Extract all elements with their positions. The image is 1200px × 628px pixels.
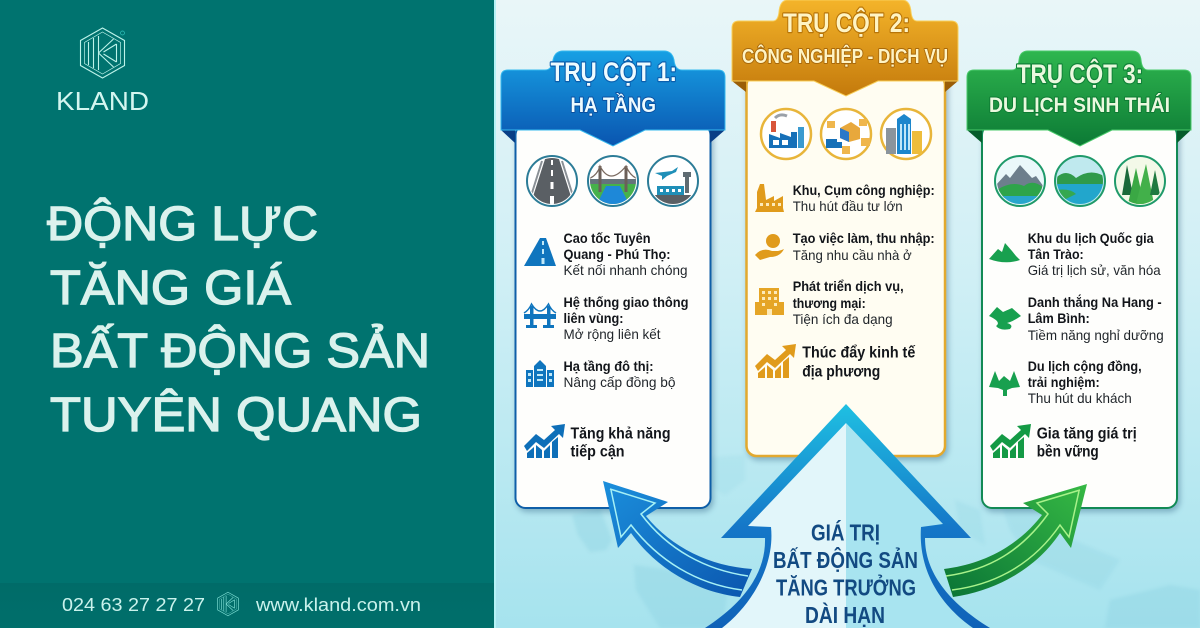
heading: main title: ĐỘNG LỰC	[47, 197, 318, 251]
arrow: blue curved arrow to pillar 1	[603, 481, 752, 597]
text: community tourism: Du lịch cộng đồng,	[1028, 358, 1142, 374]
logo: KLAND	[56, 28, 149, 116]
text: expressway: Kết nối nhanh chóng	[564, 262, 688, 278]
panel: left teal title panel	[0, 0, 494, 628]
text: Tan Trao: Tân Trào:	[1028, 246, 1084, 262]
text: Na Hang: Lâm Bình:	[1028, 310, 1090, 326]
text: sustainable value	[1037, 426, 1137, 460]
text: regional transport	[564, 294, 688, 342]
text: expressway: Quang - Phú Thọ:	[564, 246, 670, 262]
card body	[746, 75, 945, 456]
text: long-term property value: GIÁ TRỊ	[811, 518, 880, 546]
text: industrial parks: Khu, Cụm công nghiệp:	[793, 182, 935, 198]
text: jobs and income: Tăng nhu cầu nhà ở	[793, 247, 912, 263]
icon: bridge	[524, 304, 556, 328]
text: community tourism: Thu hút du khách	[1028, 390, 1132, 406]
text: urban infrastructure: Nâng cấp đồng bộ	[564, 374, 676, 390]
text: regional transport: Hệ thống giao thông	[564, 294, 688, 310]
arrow: central upward arrow	[705, 404, 990, 628]
text: services and trade: thương mại:	[793, 295, 866, 311]
text: urban infrastructure: Hạ tầng đô thị:	[564, 358, 654, 374]
text: regional transport: liên vùng:	[564, 310, 624, 326]
panel: infographic background with world map	[494, 0, 1200, 628]
icon: logistics circle	[821, 109, 871, 159]
text: services and trade: Phát triển dịch vụ,	[793, 278, 904, 294]
text: local economy: Thúc đẩy kinh tế	[802, 344, 915, 362]
text: long-term property value: TĂNG TRƯỞNG	[776, 572, 916, 600]
heading: pillar 3 ribbon: DU LỊCH SINH THÁI	[989, 94, 1170, 117]
footer: contact bar: 024 63 27 27 27	[62, 595, 205, 615]
icon: green mountain	[989, 243, 1020, 262]
heading: pillar 3 ribbon	[967, 51, 1191, 146]
text: Tan Trao: Giá trị lịch sử, văn hóa	[1028, 262, 1161, 278]
icon: forest circle	[1115, 156, 1165, 206]
icon: road	[524, 238, 556, 266]
icon: highway circle	[527, 156, 577, 206]
icon: city circle	[881, 109, 931, 159]
card body	[516, 125, 710, 508]
icon: gold trend	[755, 344, 796, 378]
panel: pillar 3 eco tourism	[967, 51, 1191, 508]
heading: pillar 1 ribbon: HẠ TẦNG	[570, 94, 656, 117]
text: Na Hang: Danh thắng Na Hang -	[1028, 293, 1162, 310]
icon: bridge circle	[588, 156, 638, 206]
text: regional transport: Mở rộng liên kết	[564, 326, 661, 342]
icon: city buildings	[526, 360, 554, 387]
icon: green landscape	[989, 307, 1021, 330]
text: local economy	[802, 344, 915, 380]
text: accessibility: tiếp cận	[570, 444, 624, 460]
text: sustainable value: bền vững	[1037, 444, 1099, 460]
text: services and trade	[793, 278, 904, 327]
text: jobs and income: Tạo việc làm, thu nhập:	[793, 230, 935, 246]
card body	[982, 125, 1177, 508]
icon: airport circle	[648, 156, 698, 206]
text: Tan Trao	[1028, 230, 1161, 278]
text: accessibility: Tăng khả năng	[570, 426, 670, 442]
icon: small logo	[218, 592, 238, 616]
heading: pillar 2 ribbon: CÔNG NGHIỆP - DỊCH VỤ	[742, 44, 948, 68]
heading: pillar 1 ribbon: TRỤ CỘT 1:	[550, 56, 677, 87]
icon: green trend	[990, 424, 1031, 458]
heading: pillar 2 ribbon	[732, 0, 958, 96]
icon: river circle	[1055, 156, 1105, 206]
arrow: green curved arrow to pillar 3	[944, 484, 1087, 597]
text: industrial parks: Thu hút đầu tư lớn	[793, 198, 903, 214]
heading: pillar 1 ribbon	[501, 51, 725, 146]
text: Na Hang: Tiềm năng nghỉ dưỡng	[1028, 327, 1164, 343]
icon: factory	[755, 184, 784, 212]
heading: main title: TĂNG GIÁ	[50, 262, 291, 315]
text: accessibility	[570, 426, 670, 460]
heading: main title	[47, 197, 430, 442]
text: community tourism	[1028, 358, 1142, 406]
icon: factory circle	[761, 109, 811, 159]
text: services and trade: Tiện ích đa dạng	[793, 311, 893, 327]
text: local economy: địa phương	[802, 364, 880, 380]
icon: blue trend	[524, 424, 565, 458]
text: long-term property value: DÀI HẠN	[805, 601, 885, 628]
text: community tourism: trải nghiệm:	[1028, 374, 1100, 390]
heading: main title: BẤT ĐỘNG SẢN	[50, 323, 430, 378]
panel: pillar 2 industry and services	[732, 0, 958, 456]
heading: pillar 2 ribbon: TRỤ CỘT 2:	[783, 7, 910, 38]
text: Na Hang	[1028, 293, 1164, 343]
logo: KLAND: KLAND	[56, 86, 149, 116]
text: expressway: Cao tốc Tuyên	[564, 230, 650, 246]
text: urban infrastructure	[564, 358, 676, 390]
panel: pillar 1 infrastructure	[501, 51, 725, 508]
icon: green trees	[989, 371, 1020, 396]
text: sustainable value: Gia tăng giá trị	[1037, 426, 1137, 442]
heading: pillar 3 ribbon: TRỤ CỘT 3:	[1017, 58, 1143, 89]
icon: mountain circle	[994, 156, 1046, 206]
footer: contact bar	[0, 583, 494, 628]
heading: main title: TUYÊN QUANG	[50, 389, 422, 442]
icon: commercial building	[755, 288, 784, 315]
text: long-term property value	[773, 518, 918, 628]
icon: hexagon K logo	[80, 28, 124, 78]
text: expressway	[564, 230, 688, 278]
text: long-term property value: BẤT ĐỘNG SẢN	[773, 545, 918, 573]
text: Tan Trao: Khu du lịch Quốc gia	[1028, 230, 1154, 246]
icon: hand with coin	[755, 234, 784, 260]
text: jobs and income	[793, 230, 935, 263]
text: industrial parks	[793, 182, 935, 214]
footer: contact bar: www.kland.com.vn	[255, 595, 421, 615]
